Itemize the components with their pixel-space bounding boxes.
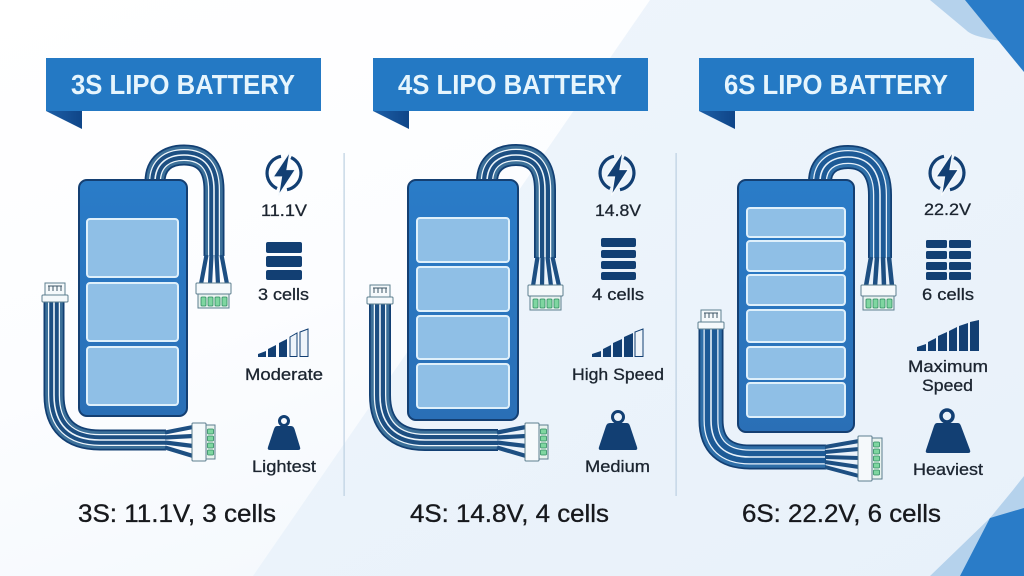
battery body: 4S	[408, 180, 518, 420]
icon: voltage bolt	[600, 152, 634, 196]
cable: 6S balance lead bottom	[711, 327, 859, 476]
connector: 3S top right	[196, 283, 231, 308]
panel: 3S battery	[42, 58, 323, 528]
icon: speed bars	[592, 329, 643, 357]
panel: 4S battery	[367, 58, 664, 528]
connector: 6S top right	[861, 285, 896, 310]
cell count label: 3 cells	[258, 286, 309, 304]
divider	[676, 153, 677, 496]
voltage label: 22.2V	[924, 201, 971, 219]
icon: cell stack	[601, 238, 636, 280]
voltage label: 14.8V	[595, 202, 641, 220]
heading: 4S banner	[373, 58, 648, 129]
connector: 6S bottom right	[858, 436, 882, 481]
connector: 3S left	[42, 283, 68, 302]
summary: 6S: 6S: 22.2V, 6 cells	[742, 500, 941, 528]
cable: 6S balance lead top	[820, 157, 892, 286]
icon: weight	[926, 410, 970, 453]
battery body: 6S	[738, 180, 854, 432]
battery body: 3S	[79, 180, 187, 416]
connector: 6S left	[698, 310, 724, 329]
speed label: Maximum	[908, 358, 988, 376]
heading: 6S banner	[699, 58, 974, 129]
connector: 3S bottom right	[192, 423, 215, 461]
icon: speed bars	[917, 320, 979, 351]
divider	[344, 153, 345, 496]
heading: 3S banner	[46, 58, 321, 129]
icon: voltage bolt	[267, 152, 301, 196]
weight label: Heaviest	[913, 461, 983, 479]
heading: 4S banner: 4S LIPO BATTERY	[398, 69, 622, 100]
icon: cell grid	[926, 240, 971, 280]
weight label: Lightest	[252, 458, 316, 476]
summary: 3S: 3S: 11.1V, 3 cells	[78, 500, 276, 528]
cell count label: 6 cells	[922, 286, 974, 304]
summary: 4S: 4S: 14.8V, 4 cells	[410, 500, 609, 528]
cable: 4S balance lead top	[487, 155, 559, 286]
cell count label: 4 cells	[592, 286, 644, 304]
speed label	[908, 358, 988, 395]
icon: voltage bolt	[930, 152, 964, 196]
cable: 3S balance lead top	[155, 155, 227, 284]
heading: 3S banner: 3S LIPO BATTERY	[71, 69, 295, 100]
speed label: Moderate	[245, 366, 323, 384]
cable: 3S balance lead bottom	[54, 300, 193, 456]
cable: 4S balance lead bottom	[380, 302, 526, 456]
icon: cell stack	[266, 242, 302, 280]
icon: weight	[268, 416, 300, 450]
connector: 4S top right	[528, 285, 563, 310]
icon: weight	[599, 412, 637, 450]
corner decoration: bottom right	[930, 476, 1024, 576]
connector: 4S left	[367, 285, 393, 304]
weight label: Medium	[585, 458, 650, 476]
connector: 4S bottom right	[525, 423, 548, 461]
corner decoration: top right	[930, 0, 1024, 72]
panel: 6S battery	[698, 58, 988, 528]
speed label: Speed	[922, 377, 973, 395]
heading: 6S banner: 6S LIPO BATTERY	[724, 69, 948, 100]
speed label: High Speed	[572, 366, 664, 384]
icon: speed bars	[258, 329, 308, 357]
voltage label: 11.1V	[261, 202, 307, 220]
